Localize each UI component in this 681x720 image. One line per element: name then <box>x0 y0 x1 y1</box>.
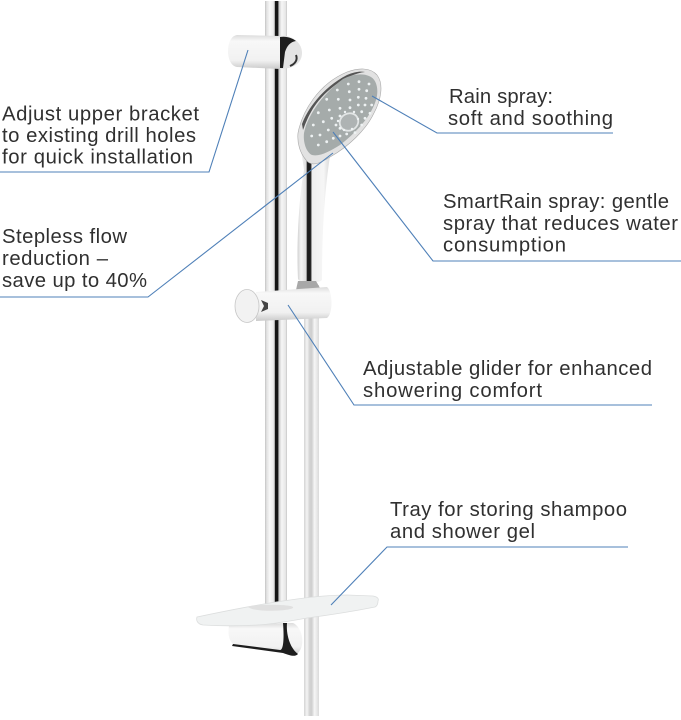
hand shower handle <box>297 150 331 282</box>
upper bracket <box>228 35 302 69</box>
callout: SmartRain spray: SmartRain spray: gentle <box>443 191 669 213</box>
callout: stepless flow reduction: Stepless flow <box>2 226 127 248</box>
callout: upper bracket: for quick installation <box>2 146 193 168</box>
hose <box>304 285 319 716</box>
slide rail <box>265 1 287 607</box>
callout: rain spray <box>372 86 613 133</box>
callout: adjustable glider: Adjustable glider for enhanced <box>363 358 652 380</box>
hand shower head <box>298 69 381 164</box>
tray <box>197 595 378 626</box>
adjustable glider <box>235 281 332 322</box>
callout: tray: Tray for storing shampoo <box>390 499 627 521</box>
callout: SmartRain spray: consumption <box>443 234 566 256</box>
callout: SmartRain spray: spray that reduces water <box>443 213 678 235</box>
callout: upper bracket: to existing drill holes <box>2 125 196 147</box>
callout: tray <box>331 499 628 605</box>
callout: SmartRain spray <box>333 132 681 261</box>
callout: stepless flow reduction: save up to 40% <box>2 270 147 292</box>
callout: rain spray: Rain spray: <box>449 86 553 108</box>
callout: adjustable glider <box>288 305 652 405</box>
callout: upper bracket: Adjust upper bracket <box>2 104 199 126</box>
callout: rain spray: soft and soothing <box>448 108 613 130</box>
callout: adjustable glider: showering comfort <box>363 380 542 402</box>
callout: tray: and shower gel <box>390 521 535 543</box>
spray nozzles <box>310 80 373 146</box>
callout: upper bracket <box>0 50 248 172</box>
lower bracket <box>229 623 302 656</box>
callout: stepless flow reduction: reduction – <box>2 248 109 270</box>
callout: stepless flow reduction <box>0 153 333 297</box>
